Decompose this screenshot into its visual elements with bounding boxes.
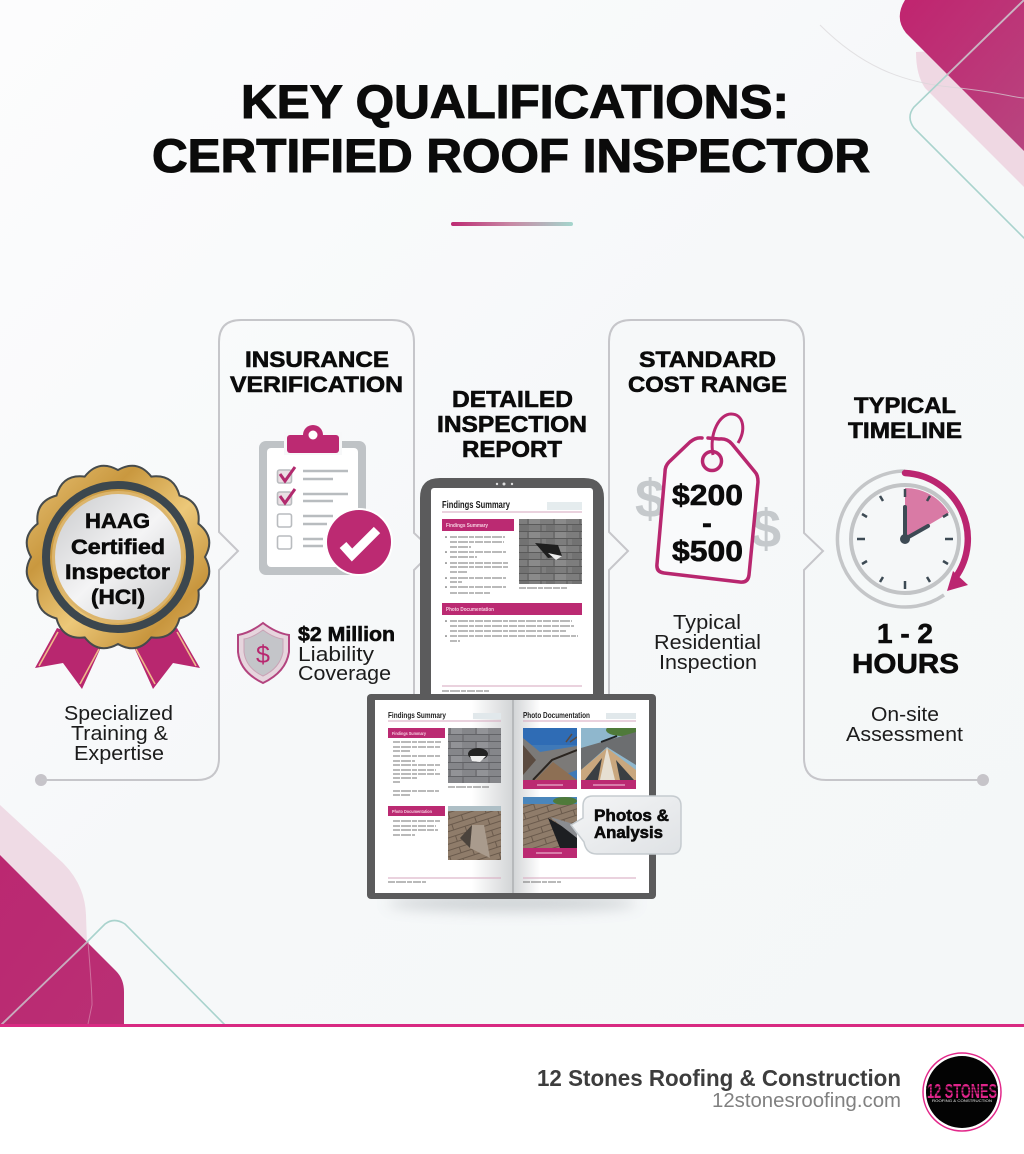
shadow under open report [387,895,637,911]
open printed report [367,694,681,899]
icon: ribbon tails [35,628,200,689]
price text: $200 [672,480,743,512]
decorative shapes: bottom left corner [0,805,226,1026]
seal text [65,510,170,609]
heading: INSURANCE [245,347,389,372]
footer [0,1024,1024,1154]
logo [923,1053,1001,1131]
footer background [0,1024,1024,1154]
title [152,75,870,182]
heading [848,393,962,443]
liability coverage text: $2 Million [298,624,395,646]
panel: HAAG certification [27,466,209,765]
cost caption [654,612,761,674]
heading: TYPICAL [854,393,956,418]
cost caption: Typical [673,612,741,634]
seal caption: Expertise [74,743,164,765]
duration text [852,618,959,679]
decorative shapes: top right corner [820,0,1024,244]
process connector line [35,320,989,786]
heading [230,347,403,397]
left page: Photo Documentation [392,809,432,814]
icon: dollar shield [238,623,289,683]
heading: TIMELINE [848,418,962,443]
icon: price tag [657,414,758,582]
panel: insurance verification [230,347,403,685]
panel: typical timeline [837,393,968,746]
icon: dollar shield: $ [256,641,270,669]
logo: ROOFING & CONSTRUCTION [932,1099,993,1103]
seal text: Certified [71,536,165,559]
price text: $500 [672,536,743,568]
right page: Photo Documentation [523,710,590,720]
cost caption: Inspection [659,652,757,674]
title: CERTIFIED ROOF INSPECTOR [152,129,870,182]
callout: photos and analysis [571,796,681,854]
heading: COST RANGE [628,372,787,397]
icon: clipboard checklist [259,425,393,576]
website: 12stonesroofing.com [712,1090,901,1112]
heading [437,386,587,462]
tablet report page [420,478,604,700]
cost caption: Residential [654,632,761,654]
icon: clock [837,471,968,607]
price text [672,480,743,568]
tablet report page: Findings Summary [446,523,488,529]
title: KEY QUALIFICATIONS: [241,75,789,128]
tablet report page: Findings Summary [442,500,510,511]
panel: detailed inspection report [367,386,681,911]
footer accent rule [0,1024,1024,1027]
heading: DETAILED [452,386,573,412]
heading [628,347,787,397]
seal caption [64,703,173,765]
seal text: Inspector [65,561,170,584]
panel: standard cost range [628,347,787,674]
tablet report page: Photo Documentation [446,607,494,613]
left page [388,710,501,882]
timeline caption: Assessment [846,724,963,746]
liability coverage text: Liability [298,644,374,666]
liability coverage text: Coverage [298,663,391,685]
timeline caption: On-site [871,704,939,726]
heading: VERIFICATION [230,372,403,397]
liability coverage text [298,624,395,685]
right page [523,710,638,882]
seal text: HAAG [85,510,150,533]
seal caption: Training & [71,723,169,745]
icon: gold seal [27,466,209,648]
left page: Findings Summary [388,710,446,720]
left page: Findings Summary [392,731,426,736]
seal caption: Specialized [64,703,173,725]
duration text: HOURS [852,648,959,679]
heading: STANDARD [639,347,776,372]
heading: REPORT [462,436,562,462]
callout: photos and analysis: Analysis [594,823,663,842]
callout: photos and analysis: Photos & [594,806,669,825]
title divider [451,222,573,226]
icon: background dollar signs [635,469,781,559]
heading: INSPECTION [437,411,587,437]
company name: 12 Stones Roofing & Construction [537,1065,901,1091]
icon: background dollar signs: $ [751,499,781,559]
seal text: (HCI) [91,586,145,609]
timeline caption [846,704,963,746]
price text: - [702,508,712,540]
duration text: 1 - 2 [877,618,933,649]
icon: background dollar signs: $ [635,469,665,529]
